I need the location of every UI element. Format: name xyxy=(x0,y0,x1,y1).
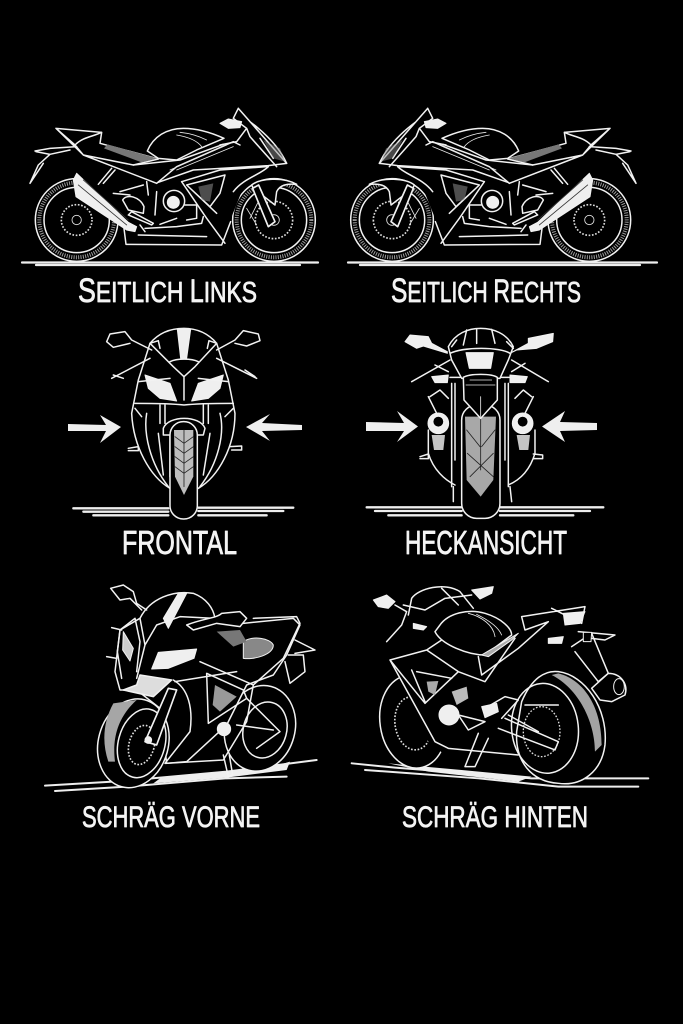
illustration: motorcycle front three-quarter view xyxy=(45,585,317,796)
label: HECKANSICHT xyxy=(405,524,567,561)
label: SEITLICH LINKS xyxy=(78,272,257,310)
arrow: right xyxy=(542,411,597,442)
ground line xyxy=(22,262,318,265)
arrow: left xyxy=(366,411,418,442)
label: SCHRÄG VORNE xyxy=(82,801,260,834)
label: FRONTAL xyxy=(122,524,237,561)
panel: Frontal xyxy=(68,328,302,561)
label: SEITLICH RECHTS xyxy=(391,272,581,310)
arrow: right xyxy=(246,414,302,441)
illustration: motorcycle front view xyxy=(73,328,293,519)
panel: Schräg hinten xyxy=(352,587,648,834)
illustration: motorcycle side view right xyxy=(351,108,636,261)
panel: Heckansicht xyxy=(366,328,603,561)
panel: Seitlich rechts xyxy=(348,108,657,310)
label: SCHRÄG HINTEN xyxy=(402,801,588,834)
ground line xyxy=(348,262,657,265)
panel: Schräg vorne xyxy=(45,585,317,834)
panel: Seitlich links xyxy=(22,108,318,310)
illustration: motorcycle side view left xyxy=(30,108,315,261)
illustration: motorcycle rear view xyxy=(367,328,603,518)
illustration: motorcycle rear three-quarter view xyxy=(352,587,648,787)
arrow: left xyxy=(68,415,121,443)
